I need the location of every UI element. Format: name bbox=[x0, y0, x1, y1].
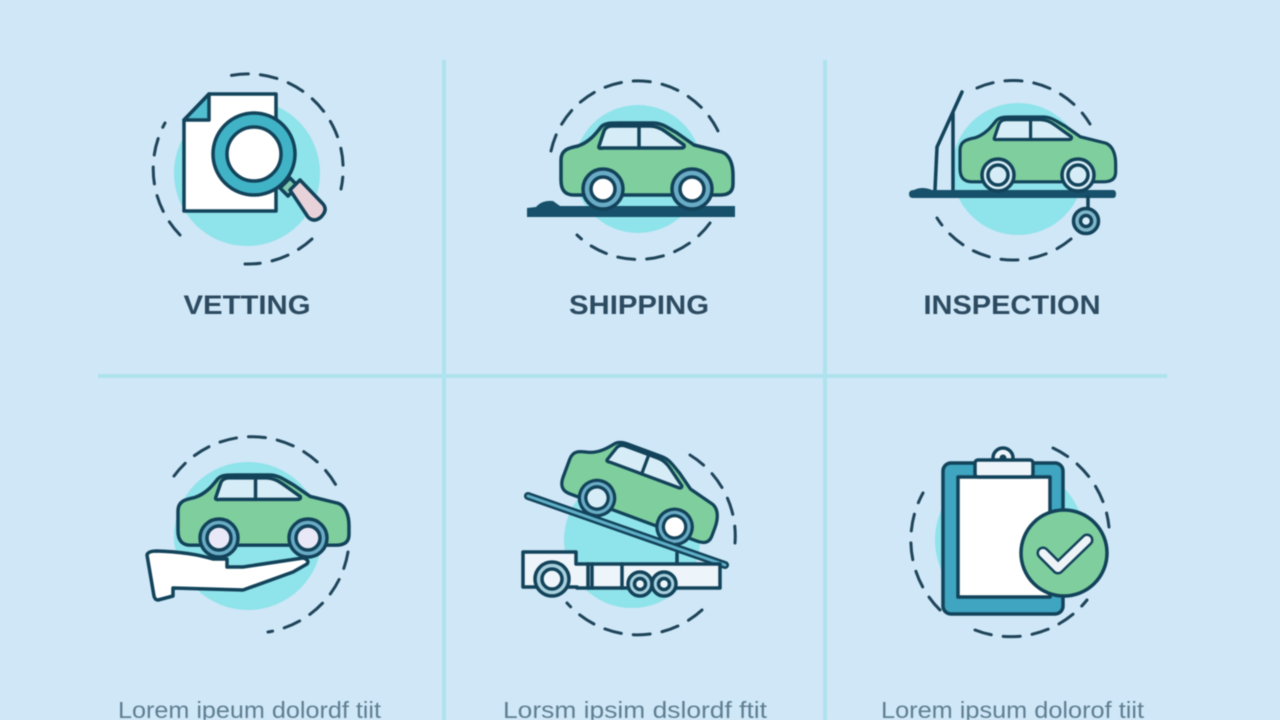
shipping teal disc bbox=[574, 105, 702, 233]
vetting teal disc bbox=[174, 100, 320, 246]
heading: inspection: INSPECTION bbox=[924, 290, 1100, 320]
approval dashed ring bbox=[911, 448, 1109, 637]
icon: car on tilted ramp truck bbox=[523, 427, 732, 596]
icon: car on lift bbox=[909, 92, 1116, 234]
icon: document bbox=[184, 94, 276, 211]
panel: shipping bbox=[527, 81, 735, 320]
ramp dashed ring bbox=[567, 455, 735, 635]
vetting dashed ring bbox=[153, 74, 343, 264]
inspection teal disc bbox=[952, 103, 1084, 235]
panel: vetting bbox=[153, 74, 343, 320]
icon: car on open hand bbox=[147, 475, 349, 600]
panel: approval bbox=[881, 448, 1145, 720]
inspection dashed ring bbox=[937, 81, 1090, 260]
panel: inspection bbox=[909, 81, 1116, 320]
icon: car on platform bbox=[527, 123, 735, 217]
shipping dashed ring bbox=[551, 81, 718, 259]
heading: vetting: VETTING bbox=[184, 290, 310, 320]
panel: hand delivery bbox=[118, 437, 382, 720]
ramp teal disc bbox=[564, 472, 700, 608]
icon: clipboard bbox=[943, 448, 1063, 614]
panel: loading ramp bbox=[503, 427, 768, 720]
hand teal disc bbox=[174, 462, 322, 610]
heading: shipping: SHIPPING bbox=[569, 290, 709, 320]
approval teal disc bbox=[935, 465, 1085, 615]
icon: green check badge bbox=[1021, 510, 1107, 596]
hand dashed ring bbox=[174, 437, 348, 632]
icon: magnifying glass bbox=[213, 113, 325, 220]
